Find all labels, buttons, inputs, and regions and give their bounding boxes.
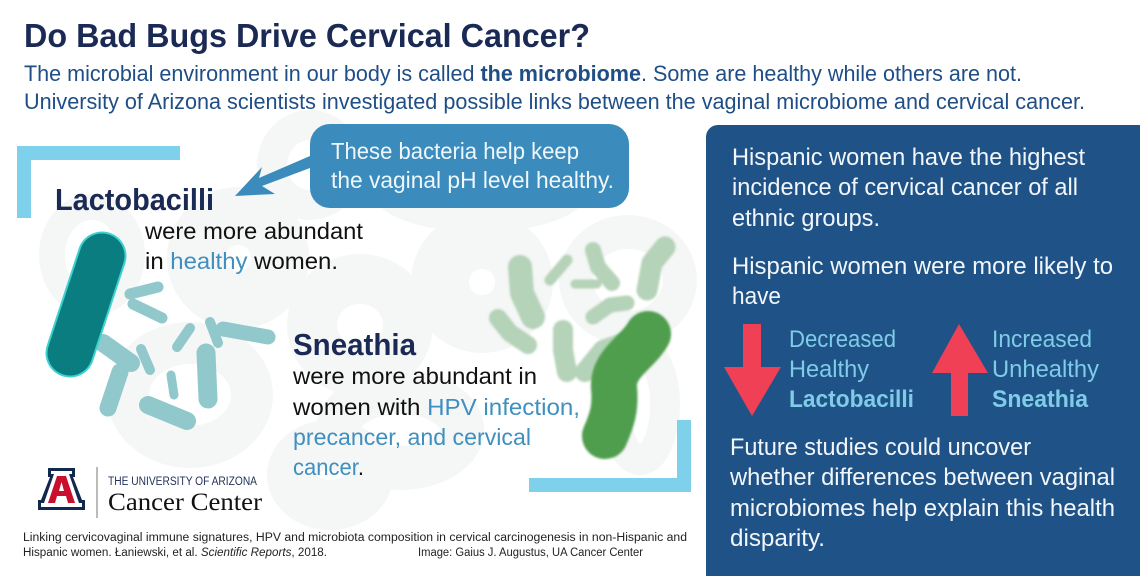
text: incidence: ethnic groups.	[732, 205, 880, 232]
text: more likely: Hispanic women were more likely to	[732, 253, 1113, 280]
callout: bacteria pH: These bacteria help keep	[331, 138, 579, 164]
citation: Linking cervicovaginal immune signatures, HPV and microbiota composition in cervical carcinogenesis in non-Hispanic and	[23, 532, 687, 544]
callout: bacteria pH	[310, 124, 629, 208]
text: future studies: disparity.	[730, 525, 825, 552]
text: decreased Lactobacilli	[789, 326, 914, 413]
arrow: up	[932, 324, 988, 416]
citation: Image: Gaius J. Augustus, UA Cancer Center	[418, 547, 643, 559]
arrow: callout to Lactobacilli	[235, 156, 310, 196]
bracket: bottom right	[529, 420, 691, 492]
logo: block A	[38, 468, 85, 510]
text: Sneathia finding: precancer, and cervical	[293, 424, 531, 450]
logo: University of Arizona Cancer Center	[38, 467, 263, 518]
logo: University of Arizona Cancer Center: THE UNIVERSITY OF ARIZONA	[108, 476, 257, 488]
text: increased Sneathia: Sneathia	[992, 386, 1089, 413]
background: faint microbe blobs	[52, 125, 680, 505]
citation: Hispanic women. Łaniewski, et al. Scientific Reports, 2018.	[23, 547, 327, 559]
text: decreased Lactobacilli: Decreased	[789, 326, 896, 353]
illustration: Lactobacilli rods	[70, 256, 268, 421]
citation	[23, 532, 687, 559]
text: incidence: incidence of cervical cancer of all	[732, 174, 1078, 201]
text: decreased Lactobacilli: Lactobacilli	[789, 386, 914, 413]
text: Sneathia finding	[292, 363, 580, 480]
logo: University of Arizona Cancer Center: Cancer Center	[108, 489, 263, 516]
text: decreased Lactobacilli: Healthy	[789, 356, 869, 383]
text: future studies	[729, 434, 1115, 552]
intro text: University of Arizona scientists investigated possible links between the vaginal microbiome and cervical cancer.	[24, 89, 1085, 114]
text: increased Sneathia: Unhealthy	[992, 356, 1099, 383]
text: Sneathia finding: cancer.	[293, 454, 364, 480]
text: more likely: have	[732, 283, 781, 310]
text: Sneathia finding: women with HPV infection,	[292, 394, 580, 420]
text: incidence: Hispanic women have the highest	[732, 144, 1085, 171]
heading: Lactobacilli: Lactobacilli	[55, 182, 214, 217]
bracket: top left	[17, 146, 180, 218]
text: Sneathia finding: were more abundant in	[292, 363, 537, 389]
arrow: down	[724, 324, 781, 416]
text: incidence	[732, 144, 1085, 232]
text: future studies: microbiomes help explain this health	[730, 495, 1115, 522]
heading: Sneathia: Sneathia	[293, 327, 417, 362]
text: future studies: Future studies could uncover	[730, 434, 1031, 461]
text: Lactobacilli finding: were more abundant	[144, 218, 364, 244]
panel: health disparity	[706, 125, 1140, 576]
title: Do Bad Bugs Drive Cervical Cancer?	[24, 17, 590, 54]
text: more likely	[732, 253, 1113, 310]
illustration: Sneathia bacteria	[498, 247, 665, 436]
text: future studies: whether differences between vaginal	[729, 464, 1115, 491]
text: Lactobacilli finding: in healthy women.	[145, 248, 338, 274]
intro text: The microbial environment in our body is called the microbiome. Some are healthy while others are not.	[24, 61, 1022, 86]
callout: bacteria pH: the vaginal pH level healthy.	[331, 167, 614, 193]
text: increased Sneathia: Increased	[992, 326, 1092, 353]
intro text	[24, 61, 1085, 114]
text: increased Sneathia	[992, 326, 1099, 413]
text: Lactobacilli finding	[144, 218, 364, 274]
